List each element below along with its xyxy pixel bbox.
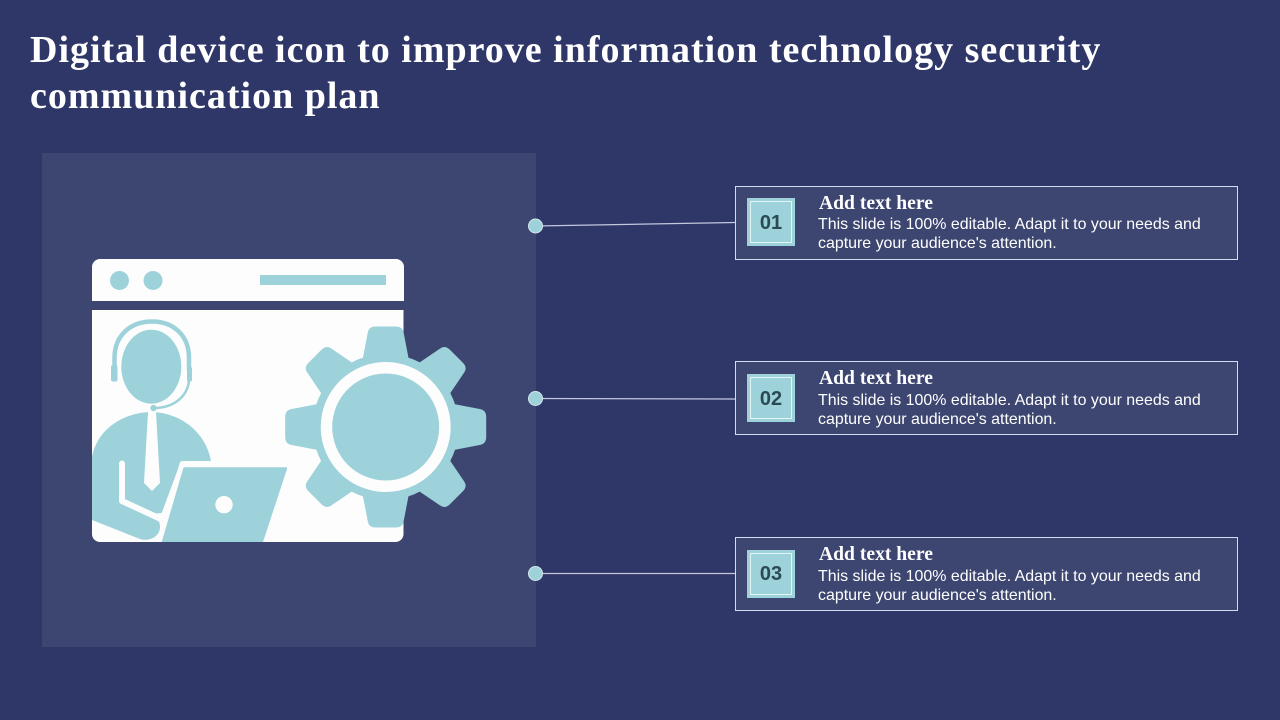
card 01 text xyxy=(818,216,1201,252)
number badge 02: 02 xyxy=(760,388,782,410)
card 02 xyxy=(735,361,1238,435)
connector 01 xyxy=(528,219,735,233)
card 01 xyxy=(735,186,1238,260)
card 03 text: This slide is 100% editable. Adapt it to your needs and xyxy=(818,568,1201,585)
number badge 01 xyxy=(747,198,795,246)
card 01 text: capture your audience's attention. xyxy=(818,235,1057,252)
card 01 heading: Add text here xyxy=(819,193,933,214)
card 03 text xyxy=(818,568,1201,604)
card 03 text: capture your audience's attention. xyxy=(818,587,1057,604)
icon: laptop xyxy=(158,462,287,542)
panel: illustration background xyxy=(42,153,536,647)
number badge 02 xyxy=(747,374,795,422)
card 02 text: This slide is 100% editable. Adapt it to your needs and xyxy=(818,392,1201,409)
card 03 heading: Add text here xyxy=(819,544,933,565)
title xyxy=(30,29,1101,117)
connector 02 xyxy=(528,392,735,406)
icon: gear xyxy=(285,326,486,528)
title: communication plan xyxy=(30,75,381,117)
number badge 03: 03 xyxy=(760,563,782,585)
card 02 text xyxy=(818,392,1201,428)
card 03 xyxy=(735,537,1238,611)
connector 03 xyxy=(528,566,735,580)
icon: support person with headset xyxy=(92,322,211,540)
number badge 01: 01 xyxy=(760,212,782,234)
title: Digital device icon to improve information technology security xyxy=(30,29,1101,71)
icon: browser window xyxy=(92,259,404,542)
card 01 text: This slide is 100% editable. Adapt it to your needs and xyxy=(818,216,1201,233)
card 02 heading: Add text here xyxy=(819,368,933,389)
card 02 text: capture your audience's attention. xyxy=(818,411,1057,428)
number badge 03 xyxy=(747,550,795,598)
